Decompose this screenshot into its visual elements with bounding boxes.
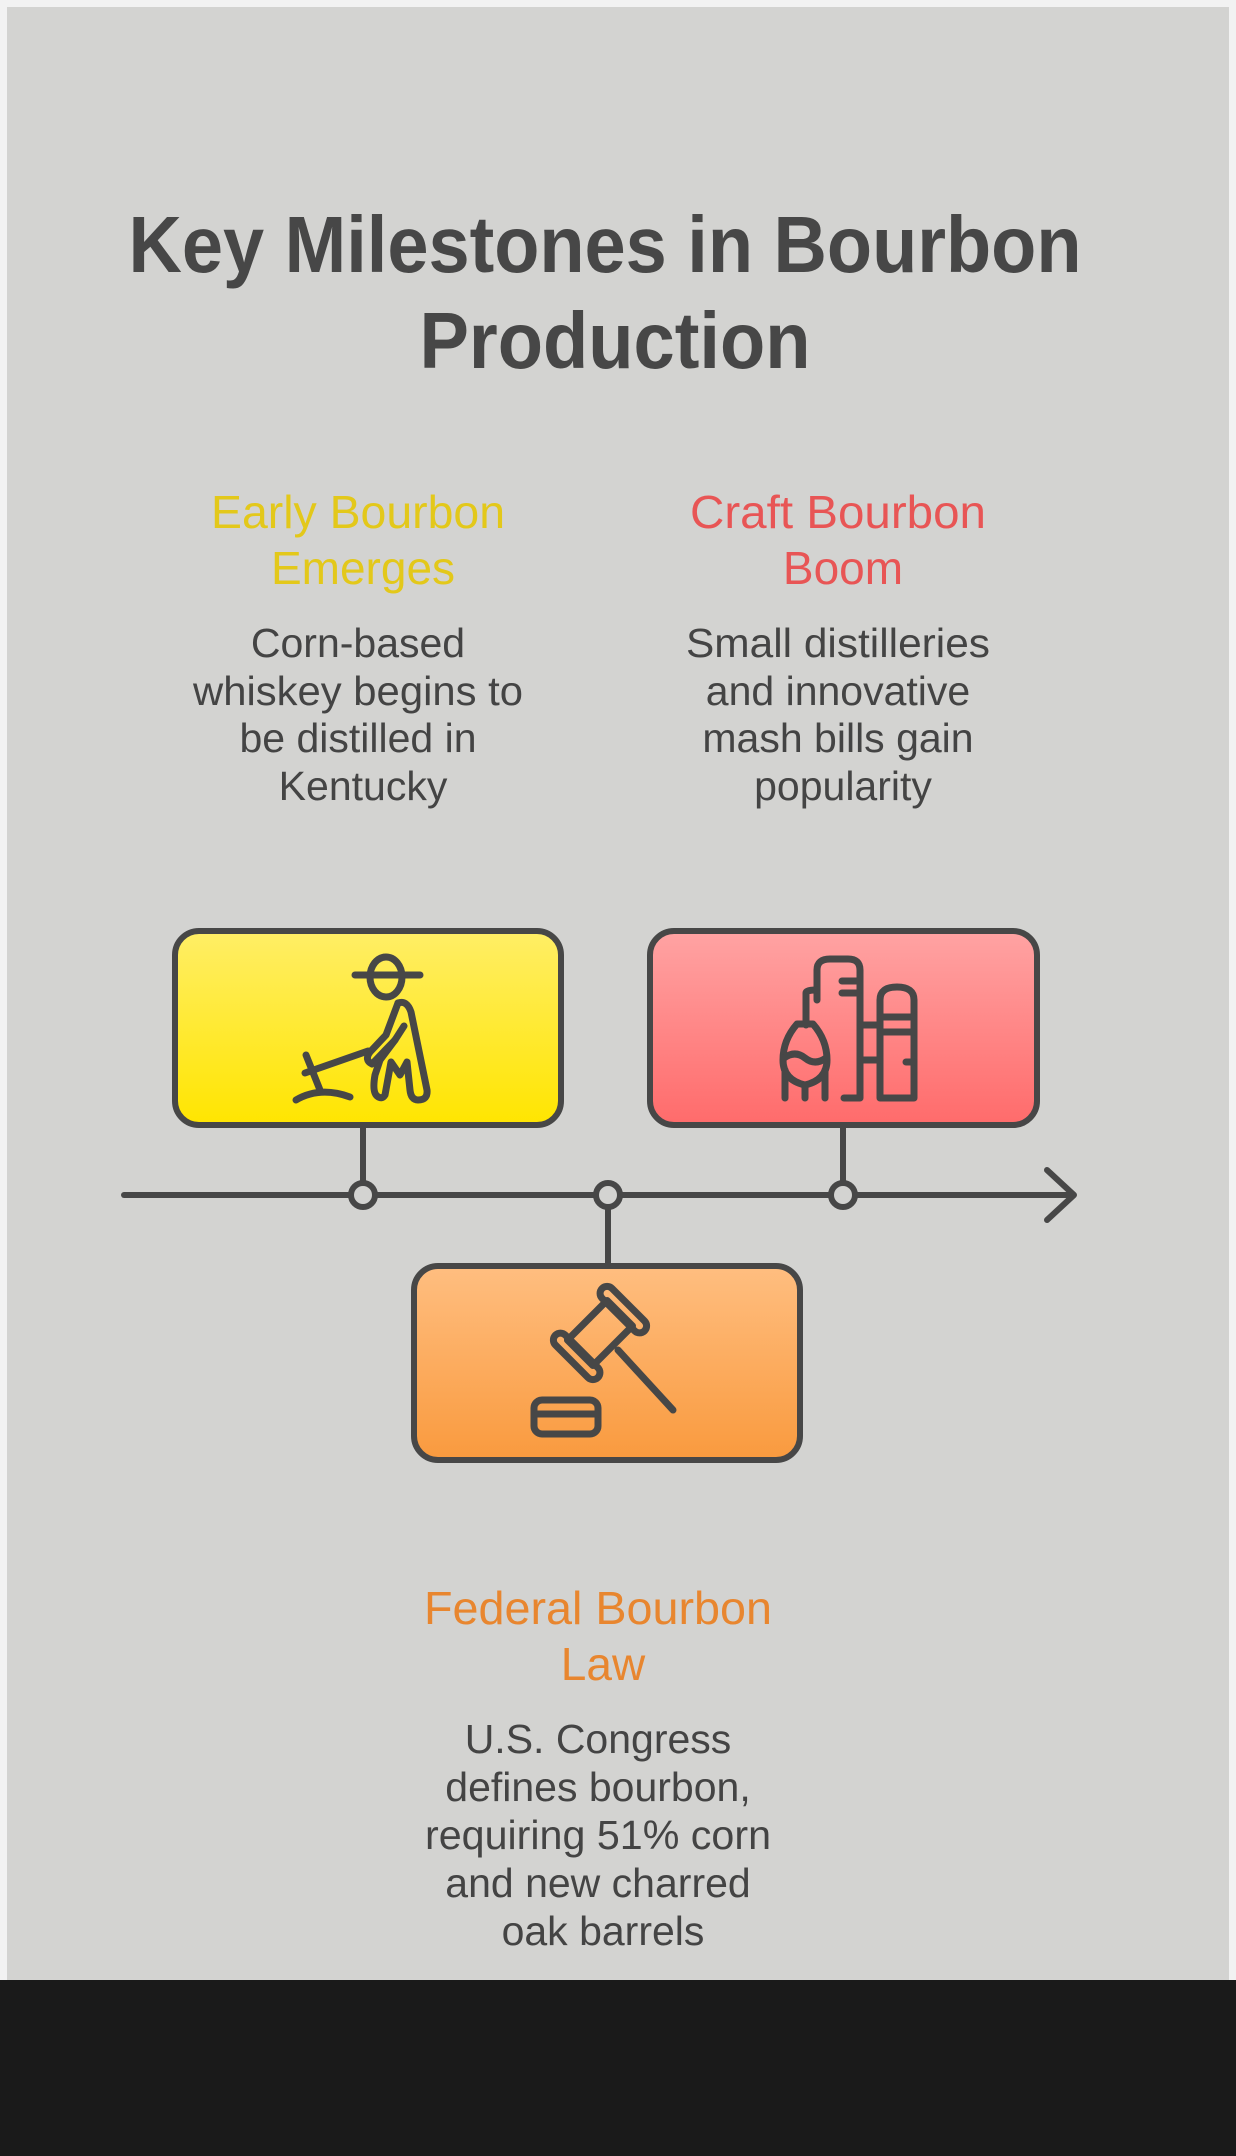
milestone text: Craft Bourbon Boom: and innovative: [706, 668, 970, 714]
milestone text: Early Bourbon Emerges: Emerges: [271, 542, 455, 594]
milestone text: Federal Bourbon Law: [424, 1582, 772, 1954]
timeline axis with arrow: [124, 1127, 1074, 1265]
milestone text: Craft Bourbon Boom: [686, 486, 990, 809]
milestone text: Craft Bourbon Boom: Craft Bourbon: [690, 486, 986, 538]
milestone text: Early Bourbon Emerges: be distilled in: [239, 715, 477, 761]
milestone text: Federal Bourbon Law: Federal Bourbon: [424, 1582, 772, 1634]
milestone text: Federal Bourbon Law: requiring 51% corn: [425, 1812, 771, 1858]
milestone text: Early Bourbon Emerges: Early Bourbon: [211, 486, 505, 538]
title: Production: [420, 296, 810, 385]
milestone text: Early Bourbon Emerges: whiskey begins to: [192, 668, 523, 714]
milestone text: Federal Bourbon Law: and new charred: [445, 1860, 751, 1906]
milestone text: Early Bourbon Emerges: Kentucky: [279, 763, 448, 809]
title: [128, 200, 1082, 385]
milestone text: Federal Bourbon Law: defines bourbon,: [445, 1764, 751, 1810]
milestone text: Craft Bourbon Boom: mash bills gain: [702, 715, 974, 761]
milestone text: Early Bourbon Emerges: [192, 486, 523, 809]
milestone text: Federal Bourbon Law: U.S. Congress: [465, 1716, 731, 1762]
icon: farmer with hoe: [296, 957, 427, 1100]
box: orange gavel: [414, 1266, 800, 1460]
box: red distillery: [650, 931, 1037, 1125]
milestone text: Craft Bourbon Boom: Boom: [783, 542, 903, 594]
milestone text: Federal Bourbon Law: oak barrels: [502, 1908, 704, 1954]
icon: distillery: [783, 959, 914, 1098]
title: Key Milestones in Bourbon: [128, 200, 1082, 289]
milestone text: Craft Bourbon Boom: popularity: [754, 763, 932, 809]
milestone text: Craft Bourbon Boom: Small distilleries: [686, 620, 990, 666]
box: yellow farmer: [175, 931, 561, 1125]
milestone text: Early Bourbon Emerges: Corn-based: [251, 620, 465, 666]
milestone text: Federal Bourbon Law: Law: [561, 1638, 646, 1690]
icon: gavel: [534, 1284, 673, 1434]
